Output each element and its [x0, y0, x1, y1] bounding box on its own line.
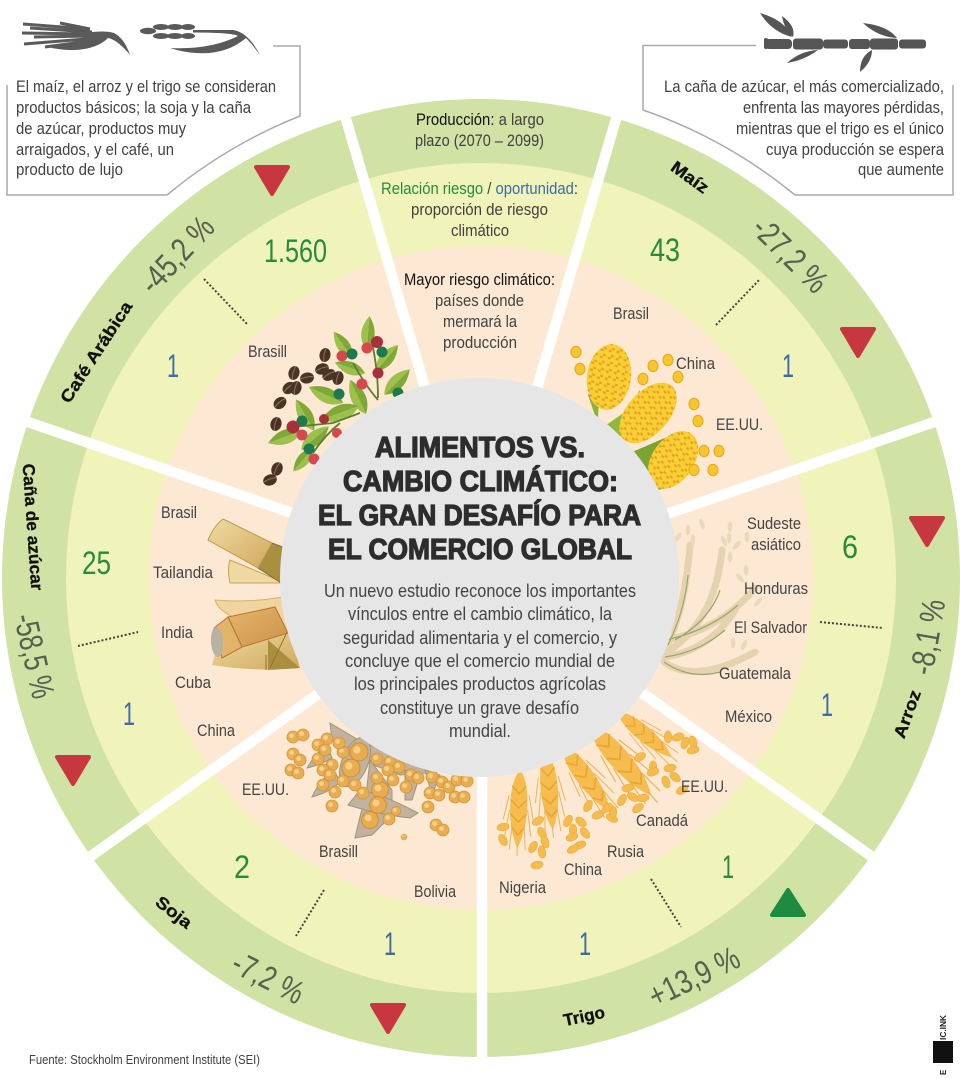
panel: Soja: EE.UU. — [242, 781, 289, 799]
panel: Maíz: -27,2 % — [745, 209, 836, 300]
title — [318, 432, 641, 566]
text: callout right: que aumente — [858, 160, 944, 179]
panel: Maíz: China — [676, 355, 716, 373]
panel: Caña de azúcar: Cuba — [175, 674, 212, 692]
panel: Arroz: México — [725, 708, 772, 726]
illustration: wheat — [496, 702, 700, 870]
panel: Caña de azúcar: 25 — [82, 545, 111, 581]
panel: Caña de azúcar — [7, 463, 236, 784]
icon: wheat right — [140, 24, 260, 55]
text: intro body: constituye un grave desafío — [380, 698, 579, 718]
panel: legend sector: producción — [443, 333, 517, 352]
callout box right — [643, 46, 953, 195]
illustration: rice — [664, 518, 763, 674]
panel: Soja: Brasill — [319, 843, 358, 861]
panel: Café Arábica: 1 — [167, 348, 179, 384]
panel: Arroz: Guatemala — [719, 665, 792, 683]
text: callout left: arraigados, y el café, un — [16, 140, 174, 159]
panel: Arroz: Sudeste — [747, 515, 801, 533]
panel: Caña de azúcar: Brasil — [161, 504, 197, 522]
illustration: corn — [571, 341, 724, 498]
panel: Trigo: Canadá — [636, 812, 689, 830]
icon: sugar cane — [760, 13, 926, 72]
text: intro body: seguridad alimentaria y el comercio, y — [343, 628, 617, 648]
title: EL GRAN DESAFÍO PARA — [318, 498, 641, 532]
illustration: soybeans — [285, 723, 473, 840]
panel: Soja: Soja — [152, 892, 196, 933]
panel: Soja: 1 — [384, 926, 396, 962]
panel: legend sector: climático — [451, 221, 509, 240]
panel: Maíz — [613, 157, 874, 434]
panel: Arroz: -8,1 % — [903, 596, 952, 678]
panel: Arroz: asiático — [751, 536, 801, 554]
text: callout left: El maíz, el arroz y el trigo se consideran — [16, 77, 276, 96]
title: CAMBIO CLIMÁTICO: — [343, 464, 618, 498]
panel: Maíz: 43 — [650, 232, 680, 268]
panel: Arroz — [719, 515, 952, 741]
panel: Maíz: 1 — [782, 348, 794, 384]
icon: wheat left — [22, 23, 130, 55]
panel: Trigo: China — [564, 861, 603, 879]
panel: Café Arábica: -45,2 % — [132, 208, 222, 301]
panel: Soja: Bolivia — [414, 883, 457, 901]
text: callout left: productos básicos; la soja y la caña — [16, 98, 251, 117]
panel: legend sector: proporción de riesgo — [411, 200, 548, 219]
panel: Trigo: 1 — [722, 849, 734, 885]
panel: Caña de azúcar: Tailandia — [153, 564, 214, 582]
panel: Maíz: Maíz — [667, 157, 712, 197]
panel: Soja: -7,2 % — [226, 944, 310, 1011]
panel: Arroz: El Salvador — [734, 619, 807, 637]
panel: Trigo: Trigo — [562, 1003, 607, 1030]
panel: Arroz: 1 — [821, 687, 833, 723]
panel: Trigo: +13,9 % — [642, 939, 745, 1014]
panel: legend sector: Relación riesgo / oportunidad: — [381, 179, 578, 198]
panel: legend sector: mermará la — [443, 312, 517, 331]
text: callout right — [664, 77, 944, 179]
title: EL COMERCIO GLOBAL — [328, 534, 632, 566]
logo: EFE: IC.INK — [939, 1015, 948, 1040]
panel: Soja: 2 — [234, 849, 250, 885]
panel: Arroz: Arroz — [890, 687, 925, 741]
text: callout left: producto de lujo — [16, 160, 123, 179]
logo: EFE — [933, 1015, 953, 1075]
panel: Café Arábica — [57, 167, 327, 407]
panel: Caña de azúcar: India — [161, 624, 194, 642]
panel: legend sector: plazo (2070 – 2099) — [415, 131, 544, 150]
panel: Soja — [152, 781, 457, 1032]
text: intro body: mundial. — [449, 721, 511, 741]
title: ALIMENTOS VS. — [375, 432, 585, 464]
panel: Trigo: 1 — [579, 926, 591, 962]
panel: Trigo: Rusia — [607, 843, 645, 861]
logo: EFE: E — [939, 1069, 948, 1075]
text: intro body — [324, 581, 636, 741]
panel: Maíz: Brasil — [613, 305, 649, 323]
panel: legend sector — [381, 110, 578, 352]
text: intro body: los principales productos agrícolas — [354, 674, 606, 694]
panel: Trigo — [499, 778, 804, 1030]
panel: Arroz: 6 — [842, 529, 858, 565]
text: source: Fuente: Stockholm Environment Institute (SEI) — [29, 1053, 260, 1067]
panel: Caña de azúcar: Caña de azúcar — [19, 463, 46, 591]
text: intro body: Un nuevo estudio reconoce los importantes — [324, 581, 636, 601]
panel: legend sector: Mayor riesgo climático: — [404, 270, 555, 289]
panel: Café Arábica: Brasill — [248, 343, 287, 361]
panel: Arroz: Honduras — [744, 580, 808, 598]
text: callout left — [16, 77, 276, 179]
panel: legend sector: Producción: a largo — [416, 110, 544, 129]
panel: Caña de azúcar: China — [197, 722, 236, 740]
panel: Café Arábica: 1.560 — [264, 233, 327, 269]
panel: Trigo: EE.UU. — [681, 778, 728, 796]
text: intro body: concluye que el comercio mundial de — [345, 651, 615, 671]
callout box left — [7, 46, 300, 195]
panel: Trigo: Nigeria — [499, 879, 547, 897]
text: intro body: vínculos entre el cambio climático, la — [348, 604, 613, 624]
center circle — [280, 378, 679, 777]
illustration: coffee — [262, 315, 415, 488]
illustration: sugar cane pieces — [208, 519, 300, 670]
panel: Café Arábica: Café Arábica — [57, 298, 137, 407]
panel: legend sector: países donde — [435, 291, 524, 310]
text: callout left: de azúcar, productos muy — [16, 119, 186, 138]
panel: Caña de azúcar: -58,5 % — [7, 610, 62, 702]
panel: Caña de azúcar: 1 — [123, 696, 135, 732]
panel: Maíz: EE.UU. — [716, 416, 763, 434]
